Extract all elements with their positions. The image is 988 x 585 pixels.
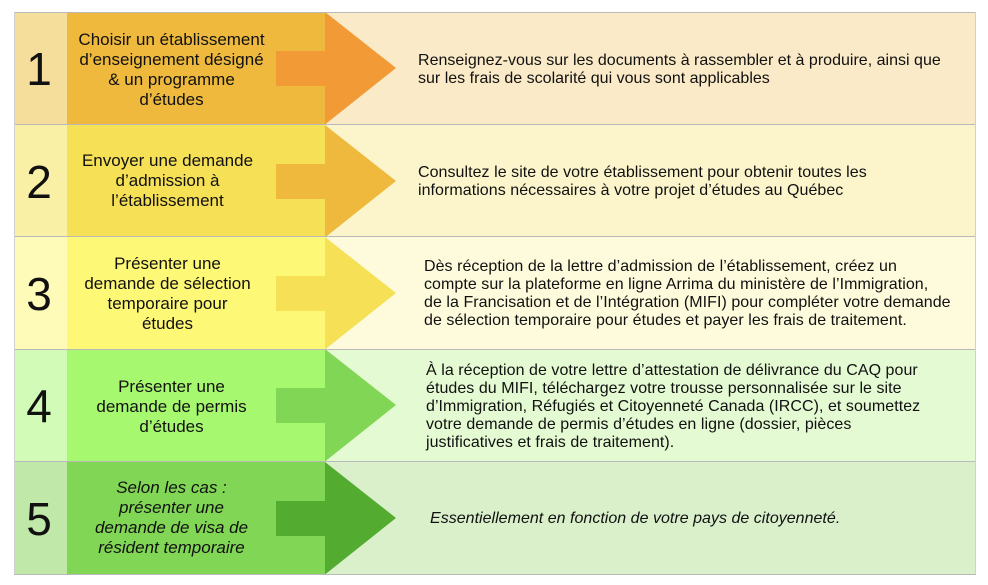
number cell 3 <box>14 237 67 350</box>
number 3: 3 <box>26 268 52 320</box>
step 4 title: demande de permis <box>96 396 247 416</box>
step 1 title: d’études <box>139 90 204 108</box>
title cell 4 <box>67 349 325 462</box>
arrow 1 <box>276 13 396 124</box>
step 1 description: sur les frais de scolarité qui vous sont applicables <box>418 70 770 87</box>
panel: step 3 <box>14 237 976 350</box>
title cell 5 <box>67 462 325 574</box>
step 4 description <box>426 361 920 451</box>
step 1 title: Choisir un établissement <box>78 30 265 48</box>
arrow 2 <box>276 125 396 236</box>
step 5 title: Selon les cas : <box>116 478 227 497</box>
number 2: 2 <box>26 156 52 208</box>
step 2 title: Envoyer une demande <box>82 151 253 170</box>
step 2 description: informations nécessaires à votre projet d’études au Québec <box>418 182 843 199</box>
number cell 4 <box>14 349 67 462</box>
arrow 3 <box>276 237 396 349</box>
number 4: 4 <box>26 380 52 432</box>
step 5 title: présenter une <box>119 498 224 517</box>
step 4 title: Présenter une <box>118 376 225 396</box>
step 5 title: demande de visa de <box>95 518 248 537</box>
step 3 description: de sélection temporaire pour études et payer les frais de traitement. <box>424 312 907 329</box>
step 1 title: d’enseignement désigné <box>79 50 264 68</box>
step 2 title: d’admission à <box>116 171 219 190</box>
panel: step 4 <box>14 349 976 462</box>
step 3 description: de la Francisation et de l’Intégration (MIFI) pour compléter votre demande <box>424 294 951 311</box>
step 4 title <box>96 376 247 436</box>
number 5: 5 <box>26 492 52 544</box>
step 3 title: demande de sélection <box>84 274 251 292</box>
step 2 description <box>418 164 867 199</box>
panel: step 2 <box>14 124 976 237</box>
step 1 description: Renseignez-vous sur les documents à rassembler et à produire, ainsi que <box>418 52 941 69</box>
step 1 title <box>78 30 265 108</box>
title cell 1 <box>67 12 325 124</box>
title cell 3 <box>67 237 325 350</box>
step 3 description <box>424 258 951 329</box>
step 3 title <box>84 254 251 332</box>
step 5 title <box>95 478 248 557</box>
step 4 description: études du MIFI, téléchargez votre trousse personnalisée sur le site <box>426 380 902 397</box>
number 1: 1 <box>26 43 52 95</box>
number cell 2 <box>14 124 67 237</box>
step 5 title: résident temporaire <box>98 538 245 557</box>
step 3 description: Dès réception de la lettre d’admission de l’établissement, créez un <box>424 258 897 275</box>
step 5 description: Essentiellement en fonction de votre pays de citoyenneté. <box>430 510 840 527</box>
step 3 title: Présenter une <box>114 254 221 272</box>
step 1 description <box>418 52 941 87</box>
step 2 description: Consultez le site de votre établissement pour obtenir toutes les <box>418 164 867 181</box>
step 4 description: justificatives et frais de traitement). <box>426 434 674 451</box>
step 3 description: compte sur la plateforme en ligne Arrima du ministère de l’Immigration, <box>424 276 928 293</box>
number cell 1 <box>14 12 67 124</box>
title cell 2 <box>67 124 325 237</box>
number cell 5 <box>14 462 67 574</box>
step 4 description: votre demande de permis d’études en ligne (dossier, pièces <box>426 416 851 433</box>
step 4 description: d’Immigration, Réfugiés et Citoyenneté Canada (IRCC), et soumettez <box>426 398 920 415</box>
arrow 4 <box>276 350 396 461</box>
step 1 title: & un programme <box>108 70 235 88</box>
step 4 description: À la réception de votre lettre d’attestation de délivrance du CAQ pour <box>426 362 918 379</box>
step 3 title: études <box>142 314 193 332</box>
step 3 title: temporaire pour <box>107 294 228 312</box>
step 2 title <box>82 151 253 210</box>
panel: step 1 <box>14 12 976 124</box>
step 4 title: d’études <box>139 416 204 436</box>
panel: step 5 <box>14 462 976 574</box>
step 2 title: l’établissement <box>111 191 224 210</box>
arrow 5 <box>276 462 396 574</box>
